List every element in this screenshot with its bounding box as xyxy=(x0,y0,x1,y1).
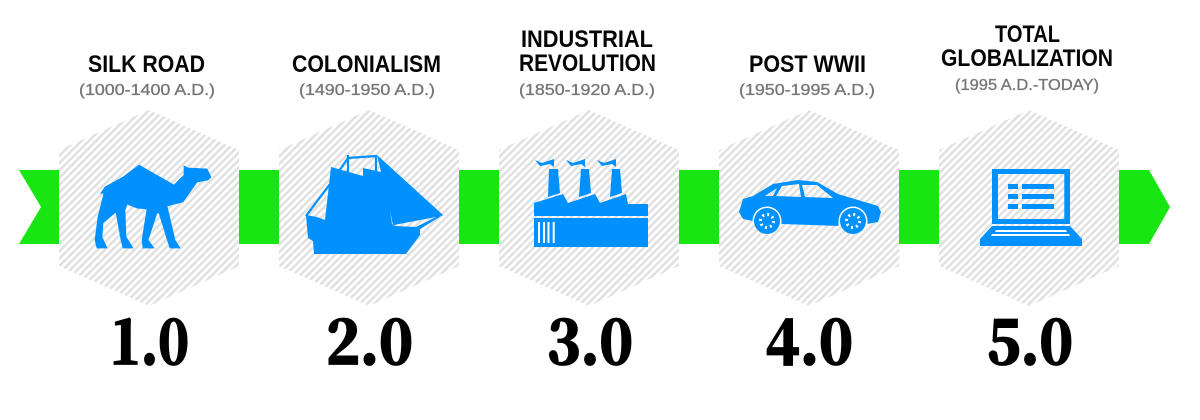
number: 1.0 xyxy=(110,293,189,382)
number: 4.0 xyxy=(766,293,853,382)
number: 3.0 xyxy=(547,293,633,382)
connector 1 xyxy=(239,170,280,244)
hexagon xyxy=(59,110,239,306)
heading line 2: GLOBALIZATION xyxy=(941,45,1113,72)
heading line 2: REVOLUTION xyxy=(519,50,656,77)
heading: COLONIALISM xyxy=(292,51,441,78)
heading: INDUSTRIAL xyxy=(521,26,653,53)
panel: total globalization xyxy=(939,21,1119,382)
connector 3 xyxy=(679,170,720,244)
timeline ribbon xyxy=(19,170,1170,244)
connector 2 xyxy=(459,170,500,244)
hexagon xyxy=(279,110,459,306)
panel: silk road xyxy=(59,51,239,382)
date range: (1490-1950 A.D.) xyxy=(299,82,435,99)
date range: (1950-1995 A.D.) xyxy=(739,82,875,99)
heading: TOTAL xyxy=(995,21,1060,48)
ribbon start notch xyxy=(19,170,60,244)
connector 4 xyxy=(899,170,940,244)
icon: camel xyxy=(95,165,211,248)
icon: laptop xyxy=(980,169,1082,246)
icon: car xyxy=(739,180,881,234)
number: 5.0 xyxy=(987,293,1073,382)
panel: industrial revolution xyxy=(499,26,679,382)
heading: POST WWII xyxy=(749,51,866,78)
icon: factory xyxy=(534,159,648,247)
icon: sailing ship xyxy=(306,155,443,254)
hexagon xyxy=(719,110,899,306)
hexagon xyxy=(499,110,679,306)
panel: post wwii xyxy=(719,51,899,382)
date range: (1000-1400 A.D.) xyxy=(79,82,215,99)
date range: (1995 A.D.-TODAY) xyxy=(955,77,1099,94)
ribbon end arrow xyxy=(1119,170,1170,244)
number: 2.0 xyxy=(326,293,413,382)
panel: colonialism xyxy=(279,51,459,382)
heading: SILK ROAD xyxy=(88,51,205,78)
date range: (1850-1920 A.D.) xyxy=(519,82,655,99)
hexagon xyxy=(939,110,1119,306)
